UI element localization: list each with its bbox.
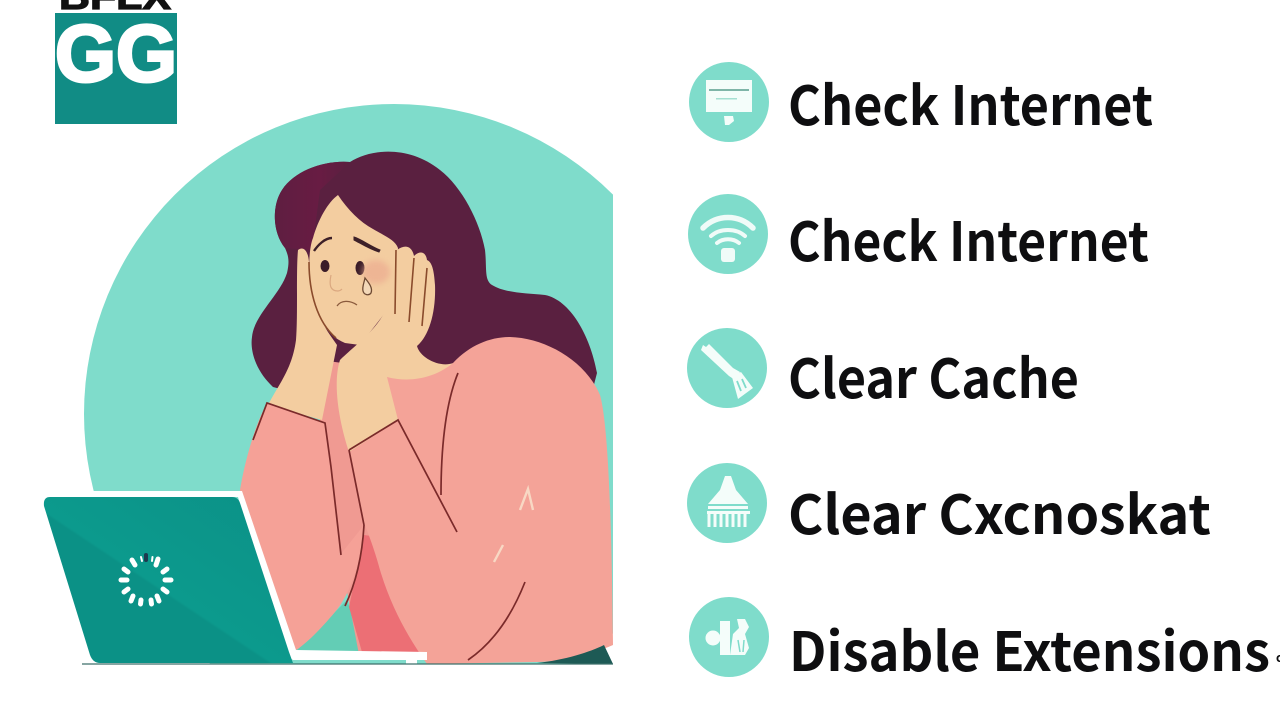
background circle bbox=[84, 104, 613, 664]
hair highlight bbox=[275, 162, 350, 250]
icon: monitor bbox=[689, 62, 769, 142]
label: Check Internet bbox=[788, 62, 1153, 141]
sweater body bbox=[349, 337, 613, 664]
teal gap between arms bbox=[297, 600, 358, 651]
item 4: clear cxcnoskat bbox=[687, 463, 1211, 550]
icon: broom bbox=[687, 463, 767, 543]
finger lines bbox=[395, 250, 427, 326]
logo bbox=[55, 0, 177, 124]
cheek blush bbox=[362, 260, 390, 284]
tear bbox=[363, 278, 372, 295]
white area beneath the circle bbox=[0, 664, 613, 720]
label: Disable Extensions bbox=[789, 608, 1270, 687]
logo: teal square bbox=[55, 13, 177, 124]
mouth bbox=[337, 301, 357, 306]
eyebrows bbox=[314, 238, 332, 251]
icon: brush bbox=[687, 328, 767, 408]
label: Clear Cache bbox=[788, 335, 1079, 414]
item 1: check internet bbox=[689, 62, 1153, 142]
icon: wifi bbox=[688, 194, 768, 274]
eyes bbox=[320, 260, 330, 272]
sleeve and fold lines bbox=[253, 373, 525, 660]
left sleeve bbox=[240, 403, 364, 652]
right hand and arm bbox=[337, 247, 453, 452]
face bbox=[309, 195, 398, 345]
loading spinner bbox=[121, 555, 171, 604]
label: Clear Cxcnoskat bbox=[788, 471, 1211, 550]
sweater highlights bbox=[494, 489, 533, 562]
laptop screen back bbox=[44, 497, 293, 663]
face outline bbox=[309, 262, 336, 338]
dark trousers bbox=[537, 645, 613, 664]
sweater torso centre bbox=[320, 362, 369, 652]
label: Check Internet bbox=[788, 198, 1149, 277]
laptop white edge bbox=[88, 491, 427, 664]
darker inner sweater bbox=[349, 535, 419, 652]
item 3: clear cache bbox=[687, 328, 1079, 414]
item 2: check internet bbox=[688, 194, 1149, 277]
hair bbox=[252, 152, 597, 388]
left hand and arm bbox=[268, 248, 337, 420]
logo: GG letters: GG bbox=[55, 9, 177, 99]
laptop bbox=[44, 491, 613, 664]
nose bbox=[330, 275, 342, 291]
base line bbox=[82, 663, 613, 665]
icon: puzzle tools bbox=[689, 597, 769, 677]
illustration: sad woman at laptop bbox=[84, 104, 613, 664]
item 5: disable extensions bbox=[689, 597, 1280, 687]
